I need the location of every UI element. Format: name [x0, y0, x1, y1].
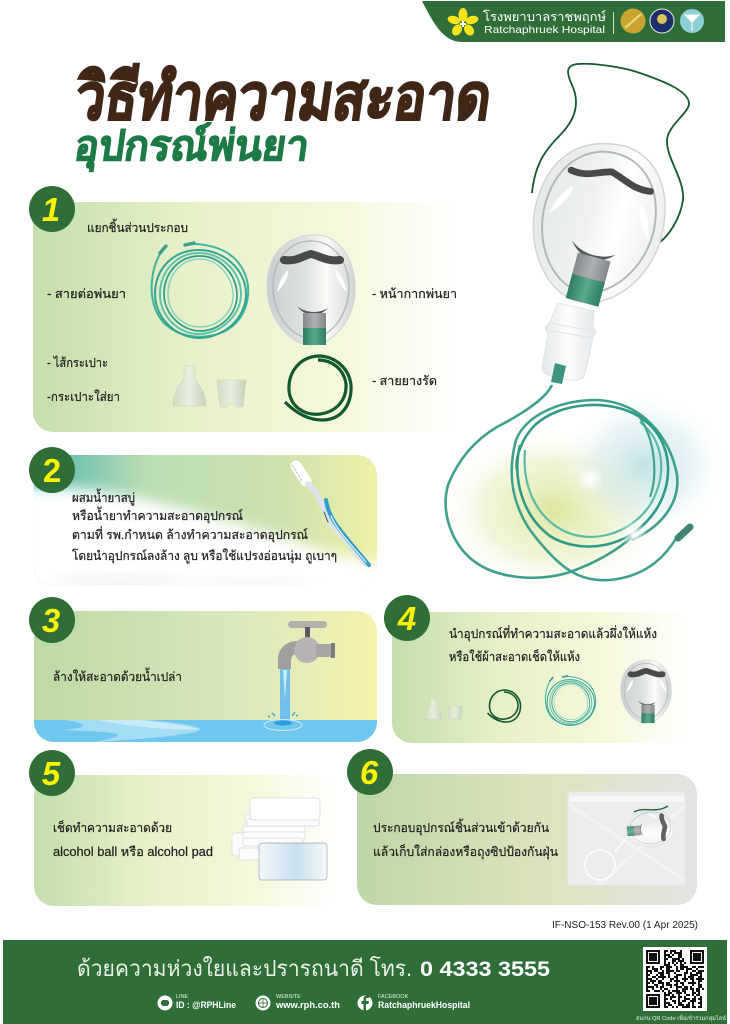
step number 3: 3 — [42, 602, 60, 639]
instruction text: ผสมน้ำยาสบู่ — [72, 488, 135, 506]
contact: website — [256, 994, 340, 1010]
instruction text: เช็ดทำความสะอาดด้วย — [53, 820, 172, 835]
instruction text: ล้างให้สะอาดด้วยน้ำเปล่า — [53, 667, 182, 684]
hospital name Thai: โรงพยาบาลราชพฤกษ์ — [483, 9, 606, 24]
instruction text — [449, 625, 657, 664]
icon: faucet — [278, 621, 335, 669]
instruction text: ตามที่ รพ.กำหนด ล้างทำความสะอาดอุปกรณ์ — [72, 526, 308, 543]
footer band — [3, 940, 727, 1024]
icon: toothbrush — [292, 465, 369, 565]
contact: line: ID : @RPHLine — [176, 1000, 236, 1010]
subtitle: อุปกรณ์พ่นยา — [71, 122, 312, 172]
panel: step 3 — [29, 597, 377, 742]
step number 3 — [29, 597, 75, 643]
instruction text: ประกอบอุปกรณ์ชิ้นส่วนเข้าด้วยกัน — [373, 818, 549, 836]
large mask — [515, 128, 682, 318]
instruction text — [373, 818, 558, 860]
image: tubing coil — [545, 676, 596, 725]
step number 1: 1 — [42, 191, 60, 228]
contact: website: www.rph.co.th — [275, 1000, 340, 1010]
image: nebulizer cups — [173, 366, 246, 407]
header banner — [422, 1, 725, 42]
icon: hospital flower logo — [447, 8, 479, 37]
contact: facebook: FACEBOOK — [378, 994, 409, 1000]
step number 4: 4 — [397, 600, 416, 637]
tube end connector — [678, 527, 690, 538]
image: tubing coil — [152, 243, 248, 338]
panel: step 4 — [384, 595, 692, 743]
step number 6 — [347, 749, 393, 795]
sparkles — [576, 465, 648, 548]
panel: step 1 — [29, 186, 461, 432]
head strap — [532, 64, 689, 242]
step number 5: 5 — [42, 755, 61, 792]
step number 1 — [29, 186, 75, 232]
panel: step 2 — [29, 447, 377, 586]
label: medicine cup: -กระเปาะใส่ยา — [47, 390, 120, 404]
QR caption: สแกน QR Code เพื่อเข้าร่วมกลุ่มไลน์ — [636, 1014, 726, 1022]
phone number: 0 4333 3555 — [420, 958, 550, 981]
closing message: ด้วยความห่วงใยและปรารถนาดี โทร. — [77, 956, 412, 981]
illustration: nebulizer mask set — [446, 64, 690, 580]
instruction text — [53, 820, 213, 859]
QR code — [643, 947, 707, 1011]
document code: IF-NSO-153 Rev.00 (1 Apr 2025) — [552, 920, 698, 931]
background glow behind tubing — [435, 390, 730, 595]
image: cups — [425, 699, 462, 720]
step number 5 — [29, 750, 75, 796]
icon: stack of alcohol pads — [232, 798, 327, 880]
instruction text: นำอุปกรณ์ที่ทำความสะอาดแล้วผึ่งให้แห้ง — [449, 625, 657, 642]
contact: line: LINE — [176, 994, 189, 1000]
image: strap coil — [488, 690, 521, 722]
instruction text — [72, 488, 337, 564]
label: mask: - หน้ากากพ่นยา — [372, 287, 457, 301]
label: tubing: - สายต่อพ่นยา — [47, 287, 126, 301]
icon: water stream — [264, 669, 302, 730]
instruction text: หรือใช้ผ้าสะอาดเช็ดให้แห้ง — [449, 649, 580, 664]
oxygen tubing — [446, 385, 677, 580]
step number 4 — [384, 595, 430, 641]
step number 2: 2 — [43, 452, 61, 489]
contact: line — [158, 994, 236, 1010]
panel: step 6 — [347, 749, 697, 905]
image: zip bag with mask — [568, 792, 685, 885]
image: rubber strap — [285, 356, 351, 420]
contact: facebook: RatchaphruekHospital — [378, 1000, 470, 1010]
image: mask — [621, 660, 671, 723]
contact: facebook — [358, 994, 470, 1010]
divider and badges — [613, 8, 704, 34]
nebulizer cup — [542, 303, 596, 384]
hospital name English: Ratchaphruek Hospital — [484, 24, 605, 36]
water surface — [34, 720, 377, 742]
step number 6: 6 — [360, 754, 379, 791]
title: วิธีทำความสะอาด — [70, 61, 496, 133]
label: nebulizer core: - ไส้กระเปาะ — [47, 356, 108, 370]
instruction text: หรือน้ำยาทำความสะอาดอุปกรณ์ — [72, 506, 243, 524]
heading: separate parts: แยกชิ้นส่วนประกอบ — [87, 218, 188, 235]
instruction text: แล้วเก็บใส่กล่องหรือถุงซิปป้องกันฝุ่น — [373, 844, 558, 860]
label: rubber strap: - สายยางรัด — [372, 374, 437, 388]
instruction text: alcohol ball หรือ alcohol pad — [53, 845, 213, 859]
step number 2 — [29, 447, 75, 493]
image: mask — [267, 235, 355, 345]
panel: step 5 — [29, 750, 340, 906]
contact: website: WEBSITE — [276, 994, 301, 1000]
instruction text: โดยนำอุปกรณ์ลงล้าง ลูบ หรือใช้แปรงอ่อนนุ่ม ถูเบาๆ — [72, 548, 337, 564]
